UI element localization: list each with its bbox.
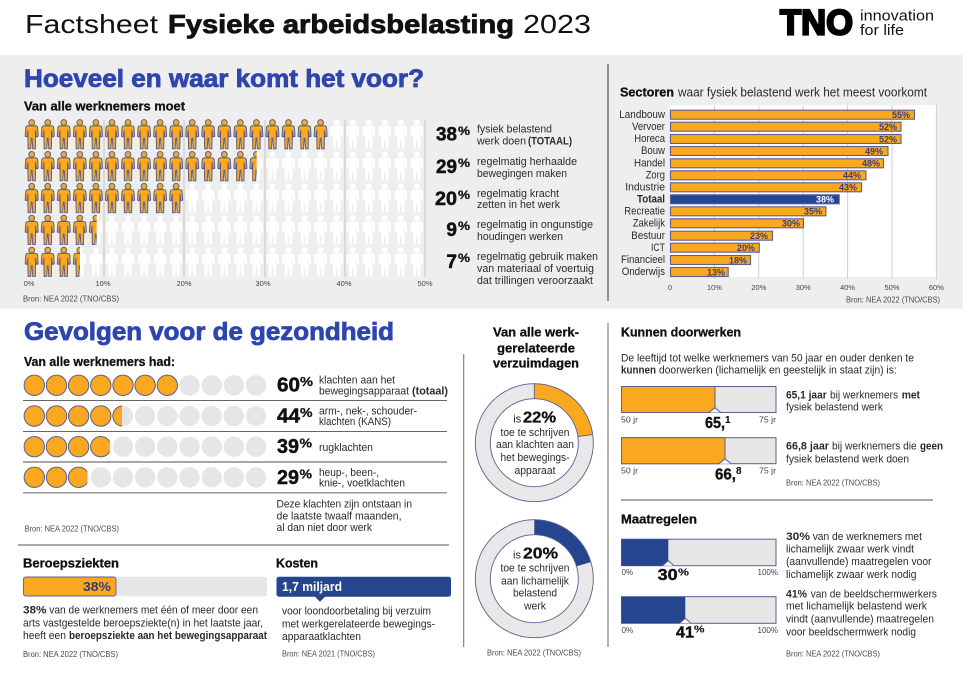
callout: 1,7 miljard: 1,7 miljard	[282, 579, 342, 594]
heading: gevolgen: Gevolgen voor de gezondheid	[24, 318, 394, 346]
gauge: 66,8: 8	[736, 466, 742, 477]
pictogram axis: 40%	[336, 279, 352, 288]
note: klachten: de laatste twaalf maanden,	[276, 511, 402, 523]
bar chart: sectoren: Landbouw	[619, 109, 665, 121]
gauge: 41%: 0%	[622, 626, 633, 635]
text: beroepsziekten: beroepsziekte aan het bewegingsapparaat	[69, 630, 267, 642]
gauge: 65,1	[621, 386, 776, 432]
pictogram axis: 30%	[255, 279, 271, 288]
title: Factsheet	[25, 9, 159, 39]
text: kosten: voor loondoorbetaling bij verzuim	[282, 606, 431, 618]
bar chart: sectoren: Onderwijs	[622, 266, 665, 278]
text: 30%: lichamelijk zwaar werk nodig	[786, 569, 916, 581]
text: beroepsziekten: arts vastgestelde beroepsziekte(n) in het laatste jaar,	[23, 618, 263, 630]
bar chart: sectoren: Recreatie	[624, 206, 665, 218]
gauge: 41%: %	[694, 624, 705, 636]
donut: 22%: aan klachten aan	[496, 439, 574, 451]
progress bar: 38%	[23, 577, 267, 596]
gauge: 66,8: 75 jr	[759, 467, 776, 476]
bar chart: sectoren: 30%	[782, 219, 800, 229]
text: beroepsziekten: 38%	[23, 605, 47, 617]
donut: 20%: belastend	[513, 588, 557, 600]
text: 65,1 jaar: fysiek belastend werk	[786, 402, 883, 414]
stat: 9%: regelmatig in ongunstige	[477, 219, 593, 231]
stat: 44%	[277, 405, 417, 428]
pictogram axis: 10%	[95, 279, 111, 288]
stat: 29%: knie-, voetklachten	[319, 478, 405, 490]
text: 65,1 jaar: 65,1 jaar	[786, 390, 827, 402]
bar chart: sectoren: 60%	[929, 283, 944, 292]
bar chart: sectoren: 48%	[862, 159, 880, 169]
text: kosten: apparaatklachten	[282, 631, 361, 643]
text: 41%: met lichamelijk belastend werk	[786, 601, 927, 613]
stat: 29%	[436, 156, 577, 180]
heading: hoeveel en waar: Hoeveel en waar komt het voor?	[24, 65, 424, 93]
note: klachten	[276, 498, 412, 534]
stat: 60%: bewegingsapparaat	[319, 385, 409, 397]
panel: kunnen doorwerken	[621, 326, 943, 488]
stat: 38%: 38	[436, 125, 457, 146]
bar chart: sectoren: 18%	[729, 255, 747, 265]
text: 41%: voor beeldschermwerk nodig	[786, 627, 916, 639]
stat: 60%	[277, 374, 448, 397]
bar chart: sectoren: 44%	[843, 171, 861, 181]
stat: 38%: werk doen	[476, 136, 526, 148]
stat: 29%	[277, 466, 405, 490]
heading: sectoren: Sectoren	[620, 86, 674, 100]
gauge: 41%: 41	[676, 624, 694, 641]
intro text: kunnen	[621, 364, 656, 376]
text: 30%: 30%	[786, 531, 810, 543]
pictogram axis: 50%	[417, 279, 433, 288]
subheading: van alle werknemers moet: Van alle werknemers moet	[24, 100, 186, 114]
text: beroepsziekten: heeft een	[23, 630, 66, 642]
bar chart: sectoren: 55%	[892, 110, 910, 120]
bar chart: sectoren: 0	[668, 283, 672, 292]
stat: 60%: (totaal)	[412, 385, 448, 397]
stat: 44%: klachten (KANS)	[319, 416, 391, 428]
heading: beroepsziekten: Beroepsziekten	[23, 557, 119, 571]
text: 66,8 jaar: bij werknemers die	[832, 440, 917, 452]
intro text	[621, 352, 914, 376]
stat: 9%	[446, 219, 593, 243]
heading: verzuimdagen	[493, 326, 579, 370]
stat: 39%: %	[300, 436, 312, 450]
gauge: 41%: 100%	[758, 626, 778, 635]
stat: 20%: zetten in het werk	[477, 199, 560, 211]
stat: 7%	[446, 251, 598, 287]
bar chart: sectoren: 38%	[816, 195, 834, 205]
subheading: van alle werknemers had: Van alle werknemers had:	[24, 355, 175, 369]
stat: 39%	[277, 436, 373, 458]
stat: 29%: heup-, been-,	[319, 467, 379, 479]
heading: sectoren: waar fysiek belastend werk het meest voorkomt	[677, 85, 927, 100]
stat: 20%: %	[458, 188, 470, 202]
stat: 39%: rugklachten	[319, 442, 373, 454]
source: Bron: NEA 2022 (TNO/CBS)	[786, 479, 880, 488]
heading: verzuimdagen: Van alle werk-	[493, 326, 579, 340]
intro text: De leeftijd tot welke werknemers van 50 jaar en ouder denken te	[621, 352, 914, 364]
donut: 22%: apparaat	[514, 465, 556, 477]
gauge: 66,8: 50 jr	[621, 467, 638, 476]
source: Bron: NEA 2022 (TNO/CBS)	[846, 296, 940, 305]
gauge: 65,1: 65,	[705, 415, 725, 432]
bar chart: sectoren: Zorg	[646, 170, 665, 182]
bar chart: sectoren: 30%	[796, 283, 811, 292]
source: Bron: NEA 2022 (TNO/CBS)	[23, 650, 118, 659]
stat: 60%: %	[300, 374, 313, 389]
bar chart: sectoren	[619, 105, 944, 292]
bar chart: sectoren: 40%	[840, 283, 855, 292]
logo: TNO innovation for life: innovation	[860, 8, 934, 24]
title	[25, 9, 591, 39]
text: 65,1 jaar: bij werknemers	[830, 390, 898, 402]
heading: kunnen doorwerken: Kunnen doorwerken	[621, 326, 741, 340]
bar chart: sectoren: 35%	[804, 207, 822, 217]
gauge: 65,1: 75 jr	[759, 415, 776, 424]
stat: 44%: %	[300, 405, 313, 420]
panel: hoeveel en waar	[0, 55, 963, 309]
donut: 22%: het bewegings-	[500, 452, 570, 464]
bar chart: sectoren: Horeca	[634, 133, 666, 145]
bar chart: sectoren: Bouw	[641, 145, 665, 157]
stat: 20%: regelmatig kracht	[477, 188, 559, 200]
stat: 29%: bewegingen maken	[477, 168, 567, 180]
intro text: doorwerken (lichamelijk en geestelijk in staat zijn) is:	[659, 364, 897, 376]
stat: 38%: %	[458, 124, 470, 138]
text: kosten: met werkgerelateerde bewegings-	[282, 619, 435, 631]
stat: 7%: 7	[446, 252, 457, 273]
donut: 20%: is	[513, 549, 521, 561]
gauge: 65,1: 50 jr	[621, 415, 638, 424]
stat: 38%: (TOTAAL)	[528, 136, 572, 148]
donut: 22%: toe te schrijven	[500, 427, 570, 439]
bar chart: sectoren: 50%	[884, 283, 900, 292]
donut: 22%	[475, 384, 593, 502]
stat: 60%: klachten aan het	[319, 375, 395, 387]
note: klachten: al dan niet door werk	[276, 522, 372, 534]
panel: kosten	[276, 557, 451, 659]
text: 66,8 jaar	[786, 440, 943, 465]
stat: 7%: %	[458, 251, 470, 265]
heading: verzuimdagen: verzuimdagen	[493, 356, 579, 370]
bar chart: sectoren: Zakelijk	[633, 218, 665, 230]
logo: TNO innovation for life: for life	[860, 22, 904, 39]
stat: 9%: 9	[446, 220, 457, 241]
gauge: 30%: 30	[658, 567, 678, 584]
source: Bron: NEA 2022 (TNO/CBS)	[487, 649, 581, 658]
stat: 44%: 44	[277, 406, 301, 428]
logo: TNO innovation for life	[780, 4, 934, 42]
pictogram chart: people	[25, 120, 423, 276]
bar chart: sectoren: Vervoer	[632, 121, 665, 133]
bar chart: sectoren: Totaal	[637, 194, 665, 206]
stat: 60%: 60	[277, 375, 300, 397]
bar chart: sectoren: 52%	[879, 122, 897, 132]
logo: TNO innovation for life: TNO	[780, 4, 853, 42]
gauge: 41%	[622, 597, 778, 641]
panel: beroepsziekten	[23, 557, 267, 659]
progress bar: 38%: 38%	[83, 579, 111, 594]
donut: 20%: werk	[523, 601, 546, 613]
heading: maatregelen: Maatregelen	[621, 512, 697, 526]
bar chart: sectoren: Bestuur	[631, 230, 665, 242]
source: Bron: NEA 2022 (TNO/CBS)	[23, 295, 119, 304]
stat: 29%: %	[458, 156, 470, 170]
stat: 44%: arm-, nek-, schouder-	[319, 406, 417, 418]
stat: 7%: dat trillingen veroorzaakt	[477, 275, 593, 287]
bar chart: sectoren: 23%	[750, 231, 768, 241]
bar chart: sectoren: 20%	[737, 243, 755, 253]
text: 41%	[786, 588, 937, 639]
panel: gevolgen	[23, 318, 448, 534]
gauge: 30%	[622, 539, 778, 584]
bar chart: sectoren: 13%	[707, 267, 725, 277]
text: 41%: van de beeldschermwerkers	[811, 588, 937, 600]
bar chart: sectoren: 43%	[839, 183, 857, 193]
text: 66,8 jaar: fysiek belastend werk doen	[786, 453, 909, 465]
gauge: 30%: 0%	[622, 568, 633, 577]
text: 30%	[786, 531, 932, 581]
text: beroepsziekten: van de werknemers met één of meer door een	[49, 605, 258, 617]
text: 65,1 jaar	[786, 390, 920, 414]
bar chart: sectoren: Handel	[634, 158, 665, 170]
stat: 29%: 29	[436, 157, 457, 178]
heading: kosten: Kosten	[276, 557, 318, 571]
bar chart: sectoren: ICT	[651, 242, 665, 254]
panel: verzuimdagen	[475, 326, 593, 658]
text: 30%: lichamelijk zwaar werk vindt	[786, 543, 914, 555]
stat: 29%: regelmatig herhaalde	[477, 156, 577, 168]
stat: 38%: fysiek belastend	[477, 124, 552, 136]
gauge: 30%: %	[678, 568, 689, 578]
pictogram axis	[24, 279, 433, 288]
text: 41%: vindt (aanvullende) maatregelen	[786, 614, 934, 626]
pictogram axis: 0%	[24, 279, 35, 288]
source: Bron: NEA 2022 (TNO/CBS)	[24, 525, 119, 534]
bar chart: sectoren: 52%	[879, 134, 897, 144]
panel: maatregelen	[621, 512, 937, 659]
donut: 20%: aan lichamelijk	[501, 576, 569, 588]
title: 2023	[523, 9, 591, 39]
dot chart: klachten	[24, 375, 266, 487]
gauge: 30%: 100%	[758, 568, 778, 577]
stat: 38%	[436, 124, 572, 148]
donut: 20%: toe te schrijven	[500, 563, 570, 575]
bar chart: sectoren: 49%	[865, 146, 883, 156]
bar chart: sectoren: Financieel	[621, 254, 665, 266]
stat: 39%: 39	[277, 436, 299, 458]
gauge: 66,8	[621, 438, 776, 483]
donut: 20%	[475, 520, 593, 638]
stat: 29%: 29	[277, 467, 299, 489]
stat: 20%	[435, 188, 560, 211]
stat: 7%: van materiaal of voertuig	[477, 263, 594, 275]
stat: 20%: 20	[435, 189, 457, 210]
source: Bron: NEA 2022 (TNO/CBS)	[786, 650, 880, 659]
pictogram axis: 20%	[176, 279, 192, 288]
text: 30%: (aanvullende) maatregelen voor	[786, 556, 932, 568]
text: 65,1 jaar: met	[902, 390, 920, 402]
bar chart: sectoren: 20%	[751, 283, 767, 292]
stat: 9%: houdingen werken	[477, 231, 563, 243]
gauge: 65,1: 1	[725, 415, 731, 426]
gauge: 66,8: 66,	[715, 466, 736, 483]
text: 30%: van de werknemers met	[813, 531, 922, 543]
callout: 1,7 miljard	[276, 577, 451, 602]
donut: 22%: 22%	[523, 409, 556, 426]
text: 66,8 jaar: 66,8 jaar	[786, 440, 830, 452]
donut: 20%: 20%	[523, 545, 558, 562]
text: beroepsziekten	[23, 605, 267, 642]
text: 41%: 41%	[786, 588, 807, 600]
text: kosten	[282, 606, 435, 643]
bar chart: sectoren: 10%	[707, 283, 722, 292]
source: Bron: NEA 2021 (TNO/CBS)	[282, 650, 375, 659]
bar chart: sectoren: Industrie	[625, 182, 665, 194]
text: 66,8 jaar: geen	[920, 440, 943, 452]
title: Fysieke arbeidsbelasting	[168, 9, 514, 39]
stat: 7%: regelmatig gebruik maken	[477, 251, 598, 263]
stat: 9%: %	[458, 219, 470, 233]
donut: 22%: is	[513, 413, 522, 425]
note: klachten: Deze klachten zijn ontstaan in	[276, 498, 412, 510]
stat: 29%: %	[300, 466, 312, 482]
heading: verzuimdagen: gerelateerde	[497, 341, 575, 355]
